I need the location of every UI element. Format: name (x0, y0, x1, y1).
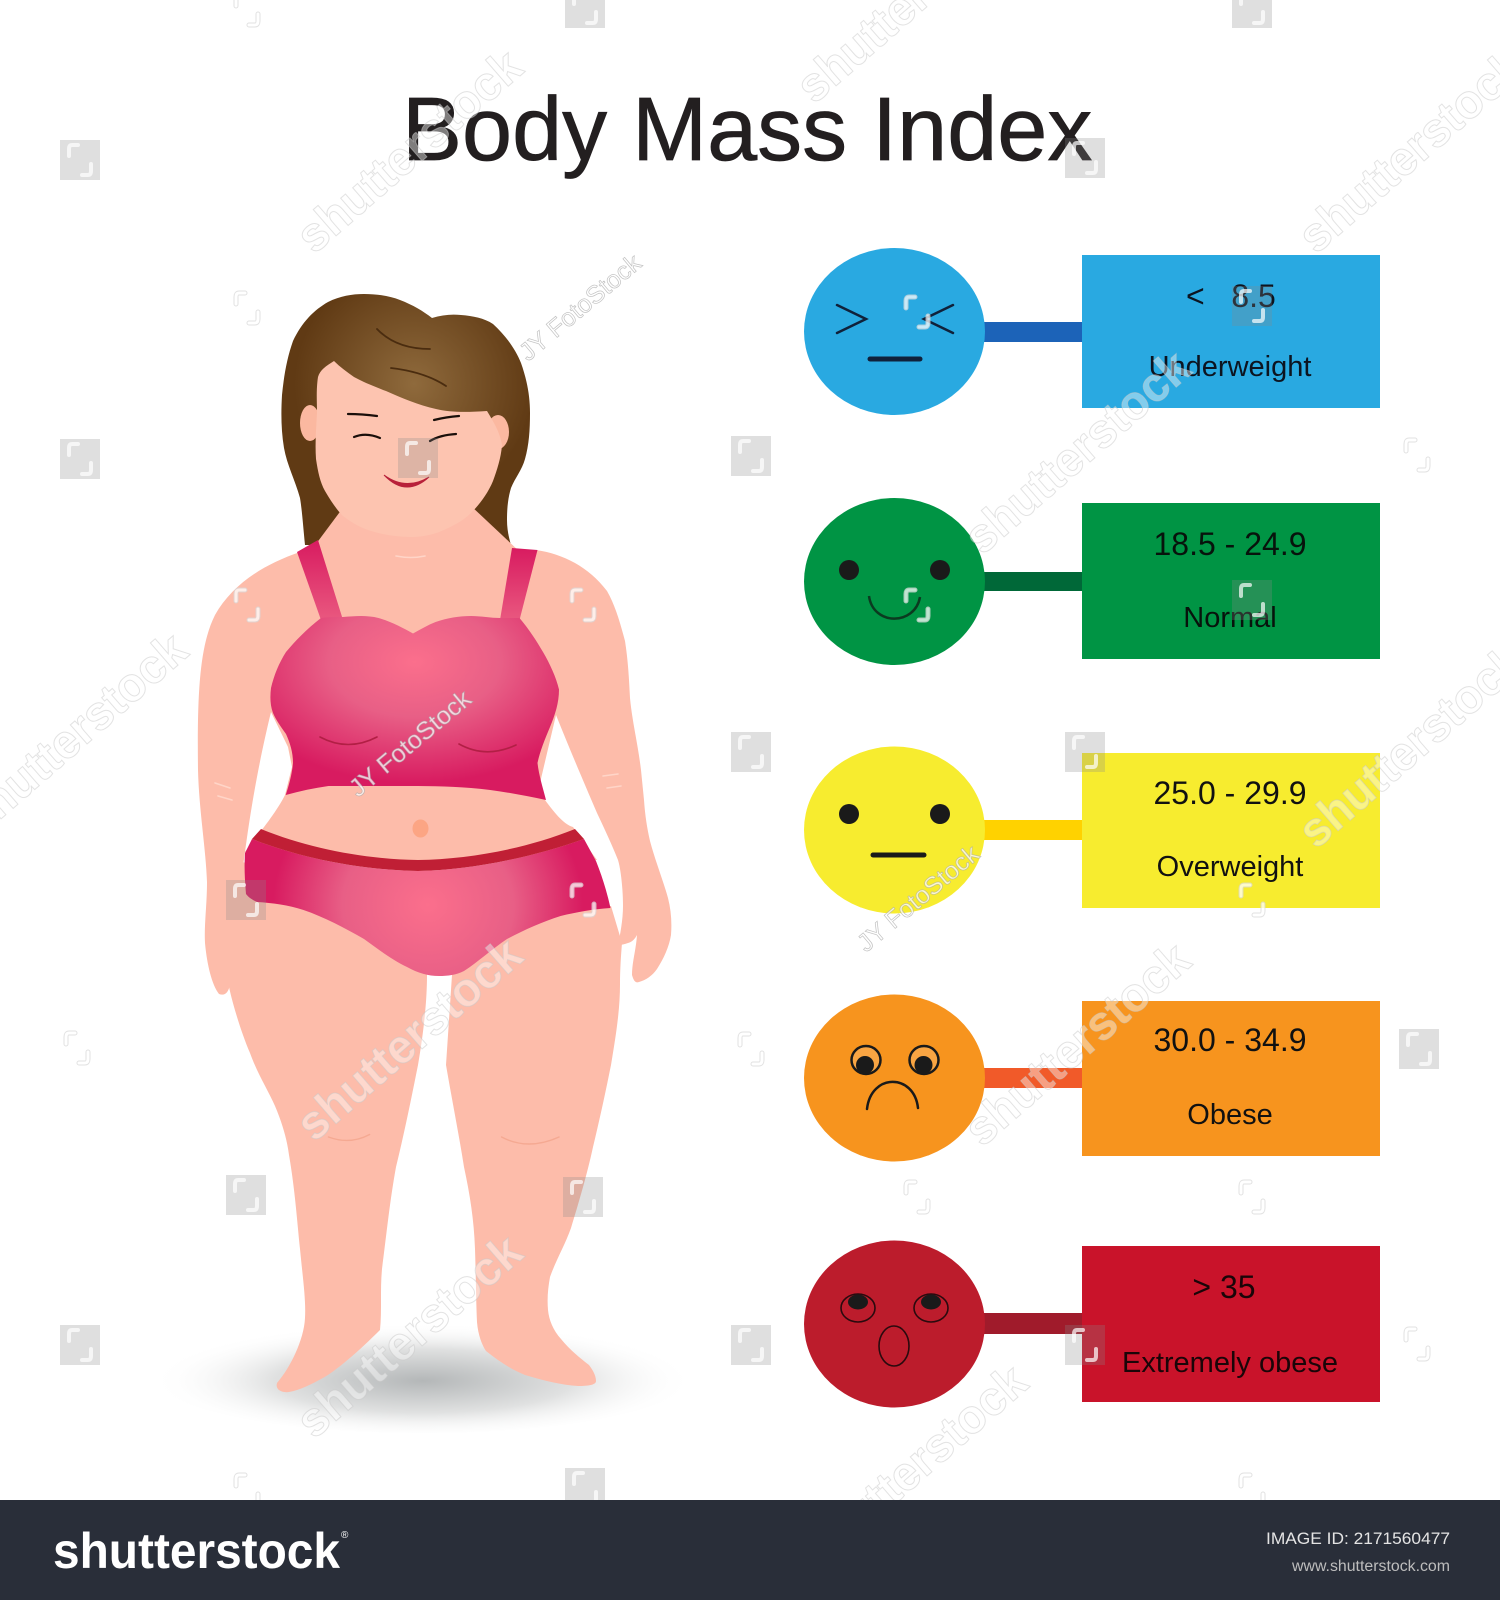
row: obese (804, 994, 1380, 1162)
website: www.shutterstock.com (1291, 1558, 1450, 1575)
ground shadow (151, 1317, 695, 1433)
label: Obese (1187, 1099, 1273, 1131)
label: Extremely obese (1122, 1347, 1338, 1379)
bra creases (320, 737, 516, 752)
label: Overweight (1157, 851, 1303, 883)
watermark layer: shutterstock (954, 932, 1201, 1156)
value: > 35 (1192, 1269, 1256, 1305)
value box (1082, 255, 1380, 408)
briefs (245, 839, 610, 976)
face circle (804, 994, 985, 1162)
right leg (430, 906, 622, 1386)
label: Underweight (1149, 351, 1311, 383)
bra top (270, 616, 559, 800)
face circle (804, 248, 985, 415)
skin crease details (328, 1134, 559, 1144)
footer bar (0, 1500, 1500, 1600)
neutral face (839, 804, 950, 855)
row: extremely obese (804, 1240, 1380, 1408)
watermark layer: shutterstock (286, 39, 533, 263)
value: 30.0 - 34.9 (1154, 1022, 1306, 1058)
hair strands (377, 329, 446, 386)
row: normal (804, 498, 1380, 665)
watermark layer: JY FotoStock (852, 839, 985, 958)
navel (412, 820, 428, 838)
connector (980, 1313, 1084, 1334)
shocked face (841, 1294, 948, 1366)
footer logo: shutterstock (53, 1523, 340, 1579)
value box (1082, 1246, 1380, 1402)
watermark layer: JY FotoStock (514, 248, 647, 367)
squinting face (837, 305, 953, 359)
value: 18.5 - 24.9 (1154, 526, 1306, 562)
registered mark: ® (341, 1530, 349, 1541)
watermark layer: shutterstock (286, 1224, 533, 1448)
connector (980, 820, 1084, 840)
bra straps (297, 540, 538, 620)
connector (980, 1068, 1084, 1088)
sad face (852, 1046, 938, 1109)
connector (980, 572, 1084, 591)
title: Body Mass Index (402, 80, 1092, 180)
value: 25.0 - 29.9 (1154, 775, 1306, 811)
face circle (804, 1240, 985, 1408)
hair (281, 294, 530, 545)
watermark layer: JY FotoStock (344, 684, 477, 803)
row: overweight (804, 746, 1380, 914)
face (316, 361, 502, 537)
eyes (348, 414, 459, 441)
left leg (215, 860, 430, 1392)
waistband (252, 829, 584, 871)
value: < 8.5 (1186, 278, 1276, 314)
watermark layer: shutterstock (791, 1354, 1038, 1578)
connector (980, 322, 1084, 342)
smile (384, 475, 429, 487)
ears (300, 405, 509, 449)
watermark layer: shutterstock (286, 927, 533, 1151)
face circle (804, 746, 985, 914)
image id: IMAGE ID: 2171560477 (1266, 1529, 1450, 1548)
value box (1082, 753, 1380, 908)
illustration: standing woman in pink underwear (151, 294, 695, 1433)
left arm and shoulders (198, 550, 671, 995)
value box (1082, 1001, 1380, 1156)
torso and belly (245, 640, 597, 860)
watermark layer: shutterstock (954, 340, 1201, 564)
neck (310, 505, 520, 640)
face circle (804, 498, 985, 665)
value box (1082, 503, 1380, 659)
row: underweight (804, 248, 1380, 415)
smiling face (839, 560, 950, 619)
label: Normal (1183, 602, 1277, 634)
